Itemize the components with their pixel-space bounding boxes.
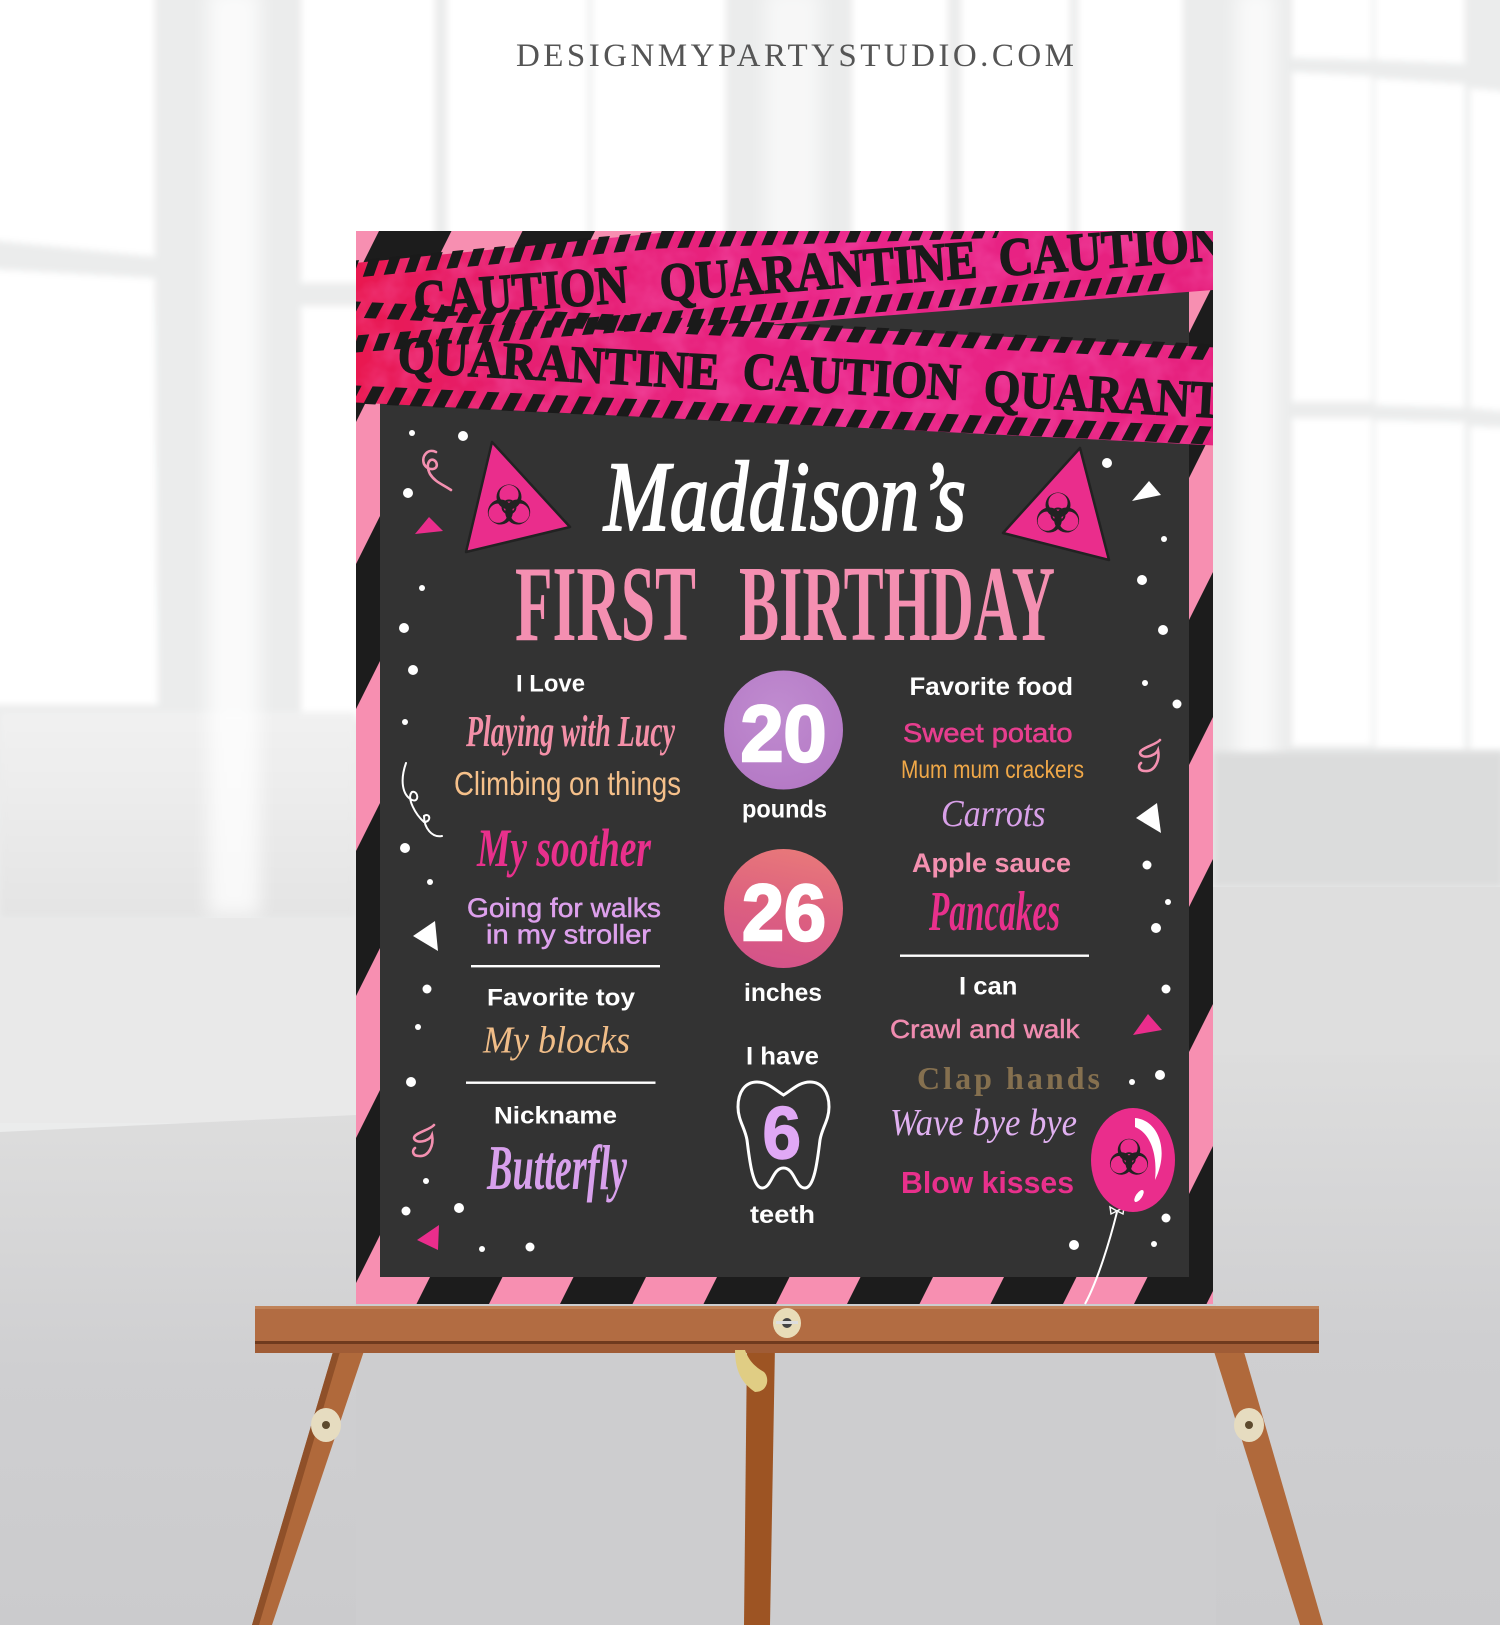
panel: chalkboard [380,285,1189,1277]
right column: I can: Clap hands [917,1060,1100,1096]
left column: I Love: Playing with Lucy [465,707,675,756]
left column: I Love: Climbing on things [454,765,681,802]
title: name: Maddison’s [602,441,966,552]
left column: Favorite toy: Favorite toy [487,984,636,1012]
right column: Favorite food: Sweet potato [903,718,1072,748]
right column: Favorite food: Apple sauce [912,848,1071,878]
left column: Favorite toy [482,984,636,1062]
tape 1 text: CAUTION [411,254,630,330]
title: first birthday: BIRTHDAY [739,545,1055,664]
left column: Nickname [486,1102,627,1203]
stat: teeth: I have [746,1042,819,1070]
icon: right biohazard triangle [1003,448,1109,560]
right column: I can [890,972,1100,1200]
tape 2 text: QUARANTINE [396,327,721,401]
confetti triangles [413,481,1162,1250]
easel legs [252,1345,1323,1625]
tape 2 text: QUARANTINE [982,360,1307,434]
stat: weight: 20 [740,689,826,778]
left column: I Love: I Love [516,670,585,698]
stat: teeth: 6 [762,1092,801,1174]
right column: Favorite food: Carrots [941,793,1046,835]
watermark heading: DESIGNMYPARTYSTUDIO.COM [516,38,1074,74]
right column: I can: I can [959,972,1018,1000]
tape 1 text: CAUTION [996,211,1225,288]
right column: I can: Blow kisses [901,1165,1074,1200]
tape mottling [356,231,1213,446]
stat: weight [724,670,843,824]
left column: Favorite toy: My blocks [482,1020,630,1062]
confetti squiggles [403,451,1160,1156]
easel [252,1306,1323,1625]
right column: Favorite food [901,673,1084,943]
tape 2 text [400,338,1213,418]
tape dashes [345,229,1234,437]
stat: teeth [738,1042,829,1229]
stat: height [724,849,843,1007]
right column: I can: Crawl and walk [890,1014,1081,1044]
right column: Favorite food: Pancakes [928,881,1060,943]
tape 2 band [356,324,1213,446]
tape 2 text: CAUTION [741,343,962,412]
left column: I Love: in my stroller [486,920,651,950]
stat: height: inches [744,979,822,1007]
easel top bar [255,1306,1319,1353]
right column: I can: Wave bye bye [890,1102,1077,1144]
tape 1 text [415,231,1213,318]
icon: left biohazard triangle [466,442,570,552]
confetti dots [399,430,1182,1252]
title: first birthday: FIRST [515,545,696,664]
board: stripes border [356,231,1213,1304]
right column: Favorite food: Mum mum crackers [901,756,1084,784]
easel hardware: knobs [311,1308,1264,1442]
tape 1 band [356,231,1213,324]
stat: height: 26 [742,868,826,957]
icon: tooth [738,1082,829,1188]
right column: Favorite food: Favorite food [910,673,1073,701]
left column: I Love: My soother [476,818,652,878]
left column: I Love [454,670,681,950]
stat: weight: pounds [742,796,827,824]
caution tape [356,231,1213,446]
title: first birthday [515,545,1055,664]
stat: teeth: teeth [750,1201,815,1229]
left column: I Love: Going for walks [467,893,661,923]
tape 1 text: QUARANTINE [657,229,979,313]
left column: Nickname: Butterfly [486,1132,627,1203]
icon: balloon [1085,1108,1175,1304]
left column: Nickname: Nickname [494,1102,617,1130]
